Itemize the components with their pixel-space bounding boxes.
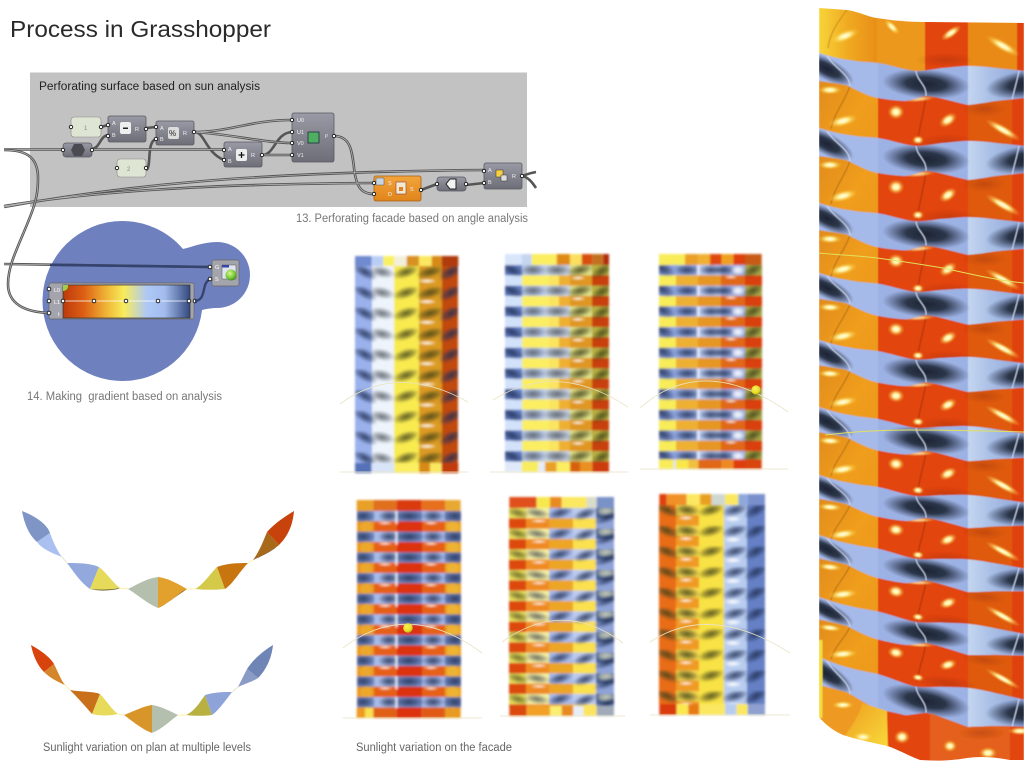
node: add: A: [228, 147, 232, 153]
wire gradient to S input: [195, 279, 212, 301]
facade elevation 6: [659, 494, 765, 715]
node: domain square: V0: [297, 141, 304, 147]
facade elevation 5: [509, 497, 614, 716]
node: number 2: 2: [127, 167, 131, 173]
caption 14: 14. Making gradient based on analysis: [27, 391, 222, 403]
top row of panels: [819, 5, 1024, 75]
blue blob: [43, 221, 250, 381]
panel: blue gradient group: [4, 150, 250, 381]
gradient node: L1: [54, 300, 60, 306]
wire to G input: [4, 264, 210, 267]
node: domain square: i²: [325, 134, 328, 140]
yellow section lines: [819, 253, 1024, 435]
node: hexagon param: [61, 143, 94, 157]
node: add: [222, 142, 264, 167]
node: surface split, orange: D: [388, 192, 392, 198]
facade elevation 3: [659, 254, 762, 469]
node: divide: R: [183, 131, 187, 137]
node: surface split, orange: [372, 176, 423, 201]
node: subtract: A: [112, 121, 116, 127]
node: boolean: B: [488, 180, 492, 186]
gradient node: L0: [54, 288, 60, 294]
node: number 1: 1: [84, 126, 88, 132]
node: boolean: A: [488, 168, 492, 174]
node: flatten param: [435, 177, 468, 191]
panel heading: Perforating surface based on sun analysis: [39, 81, 260, 93]
plan section: lower: [31, 645, 273, 733]
node: divide: A: [160, 126, 164, 132]
node: number 2: [115, 159, 148, 177]
node: number 1: [69, 117, 103, 137]
sun marker on elevation 3: [751, 385, 761, 395]
gradient node: [47, 283, 197, 319]
caption: facade: Sunlight variation on the facade: [356, 742, 512, 754]
node: domain square: U1: [297, 130, 304, 136]
plan section: upper: [22, 511, 294, 608]
panel: Grasshopper definition, gray canvas: [4, 72, 536, 207]
node: add: B: [228, 159, 232, 165]
wire into t input: [4, 150, 49, 313]
sun marker on elevation 4: [403, 623, 413, 633]
node: subtract: R: [135, 127, 139, 133]
node: domain square: V1: [297, 153, 304, 159]
facade elevation 1: [355, 256, 458, 473]
custom preview node: [208, 260, 239, 286]
node: add: R: [251, 153, 255, 159]
site arcs and ground lines: [340, 381, 790, 718]
node: divide: B: [160, 137, 164, 143]
node: divide: %: [169, 129, 176, 138]
caption 13: 13. Perforating facade based on angle analysis: [296, 213, 528, 225]
caption: plan: Sunlight variation on plan at multiple levels: [43, 742, 251, 754]
node: subtract: [106, 116, 148, 142]
title: Process in Grasshopper: [10, 16, 271, 42]
bottom row of panels: [819, 640, 1024, 768]
node: domain square: U0: [297, 118, 304, 124]
node: boolean: R: [512, 174, 516, 180]
wires: [4, 120, 536, 207]
node: surface split, orange: S: [388, 181, 392, 187]
node: surface split, orange: S: [410, 187, 414, 193]
large facade detail: [819, 8, 1024, 761]
custom preview node: S: [215, 277, 219, 283]
node: domain square: [290, 113, 336, 162]
node: divide: [154, 121, 196, 145]
node: subtract: B: [112, 133, 116, 139]
gradient node: t: [58, 312, 60, 318]
facade elevation 4: [357, 500, 461, 718]
repeating panel bands: [819, 52, 1024, 728]
node: boolean: [482, 163, 524, 189]
custom preview node: G: [215, 265, 219, 271]
facade elevation 2: [505, 254, 609, 472]
